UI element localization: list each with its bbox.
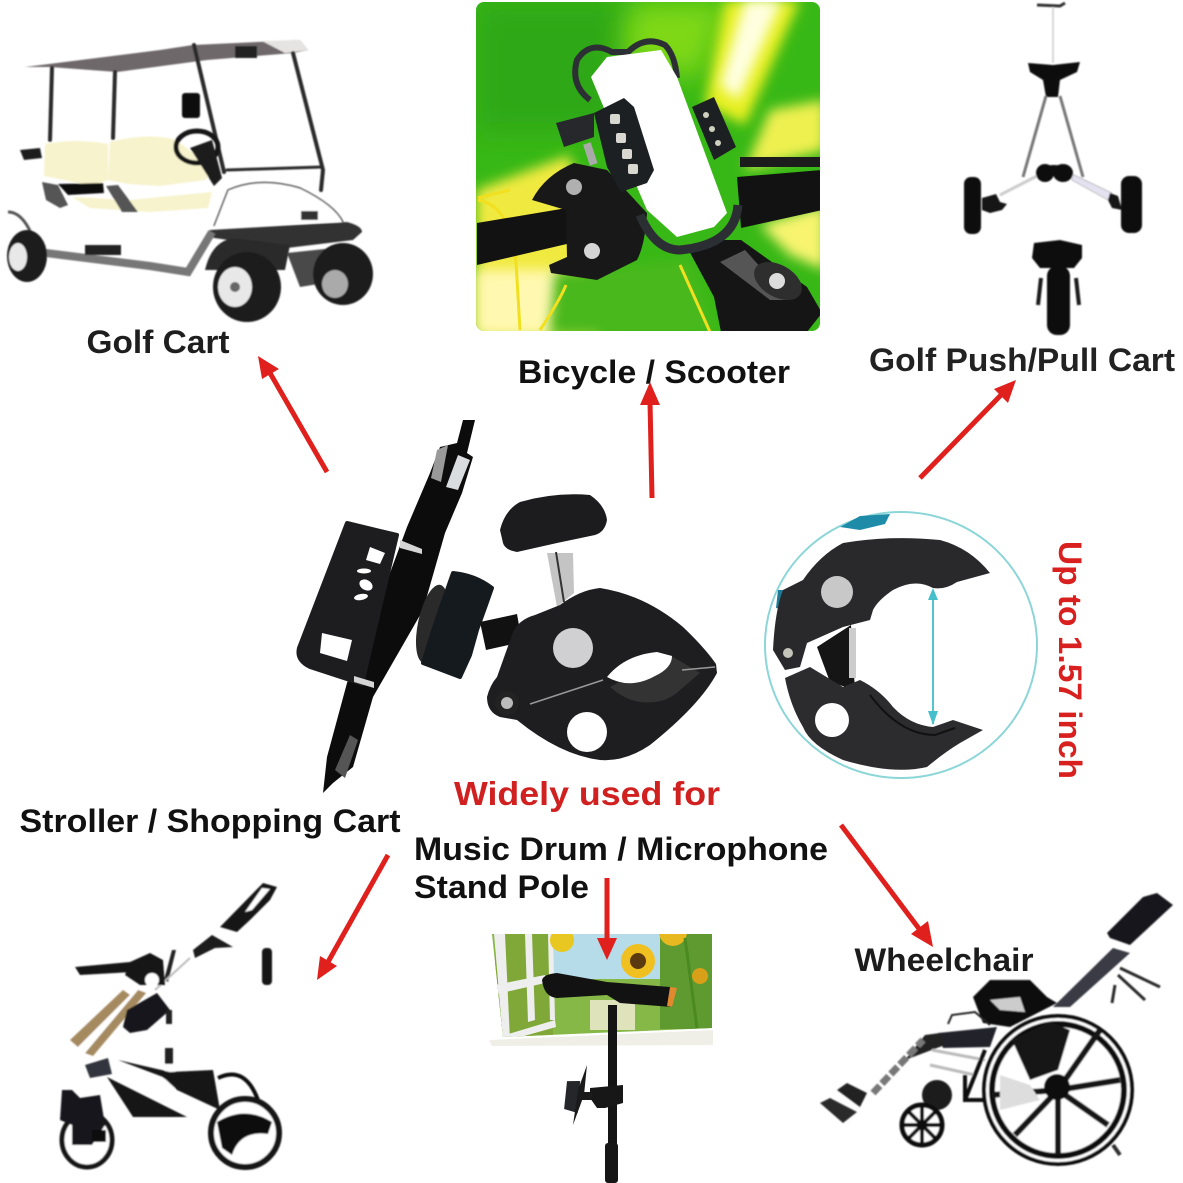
handle knob (1113, 1145, 1120, 1155)
blurred background (474, 0, 825, 335)
knob (423, 573, 492, 677)
front wheel (62, 1113, 112, 1167)
leg (873, 1040, 923, 1093)
arrow to stroller (317, 855, 388, 980)
label: golf push/pull cart: Golf Push/Pull Cart (869, 342, 1175, 378)
golf cart illustration (7, 40, 373, 322)
clamp on pole (590, 1085, 623, 1108)
sill (38, 232, 212, 272)
phone (591, 50, 727, 237)
wheels (313, 243, 373, 305)
yellow cables (478, 190, 710, 332)
golf push cart illustration (964, 3, 1142, 335)
stroller illustration (60, 883, 279, 1167)
wheelchair illustration (820, 893, 1173, 1164)
headrest (1107, 893, 1173, 945)
blue tabs (840, 514, 890, 530)
stem (687, 240, 822, 332)
label: music drum / microphone: Stand Pole (414, 869, 589, 905)
arrow to wheelchair (841, 825, 933, 947)
back (1053, 948, 1130, 1007)
arm (480, 614, 522, 650)
posts (50, 45, 323, 190)
label: diameter, rotated: Up to 1.57 inch (1052, 541, 1088, 779)
seat (938, 1027, 997, 1048)
microphone stand photo (489, 918, 713, 1183)
seam (530, 667, 715, 704)
steering wheel (176, 131, 218, 163)
grip cutouts (320, 547, 385, 661)
photo: bicycle phone mount (474, 0, 825, 335)
main clamp mount product (298, 420, 717, 793)
bolts (553, 628, 593, 668)
arrow to push cart (920, 380, 1016, 478)
handle (220, 883, 277, 932)
tube hole (610, 655, 700, 702)
casters (922, 1080, 952, 1110)
right grip (692, 97, 736, 160)
footrests (837, 1083, 867, 1107)
clamp body (487, 588, 717, 760)
handlebars (477, 208, 571, 265)
clamp (532, 163, 647, 280)
bumper (207, 222, 362, 248)
arrow to golf cart (258, 356, 327, 472)
phone grip block (298, 523, 397, 684)
post (166, 1010, 172, 1024)
pouch (123, 993, 170, 1033)
T handle (500, 494, 607, 552)
stand pole (608, 1005, 617, 1145)
bolts (821, 576, 853, 608)
armrest (948, 1012, 990, 1025)
label: stroller / shopping cart: Stroller / Shopping Cart (20, 803, 401, 839)
upper jaw (773, 538, 990, 670)
picture contents (494, 934, 712, 1037)
mirror (182, 93, 200, 118)
label: golf cart: Golf Cart (86, 324, 230, 360)
roof (25, 40, 308, 72)
heading: widely used for: Widely used for (454, 775, 720, 812)
canopy arm (75, 962, 133, 975)
microphone (542, 973, 672, 1007)
measure arrow (932, 590, 934, 724)
left grip (594, 98, 654, 192)
label: wheelchair: Wheelchair (854, 942, 1034, 978)
arrow to bicycle (640, 382, 660, 498)
main wheel (984, 1016, 1132, 1164)
cushion (973, 980, 1057, 1027)
label: music drum / microphone (414, 831, 828, 905)
straps (640, 205, 738, 250)
basket (118, 1060, 220, 1110)
screw (547, 553, 574, 607)
inner steel and black (817, 625, 855, 690)
label: bicycle / scooter: Bicycle / Scooter (518, 354, 790, 390)
flange ring (410, 582, 454, 666)
gold bars (70, 990, 130, 1047)
seats (44, 141, 108, 186)
mounting plate (323, 420, 475, 793)
steel pins (400, 540, 422, 554)
front cowl (214, 182, 343, 226)
rear wheel (211, 1099, 279, 1167)
label: music drum / microphone: Music Drum / Microphone (414, 831, 828, 867)
handle knob (556, 113, 594, 147)
open clamp inset with diameter (765, 512, 1037, 778)
lower jaw (785, 667, 983, 770)
arrow to microphone (597, 878, 617, 960)
